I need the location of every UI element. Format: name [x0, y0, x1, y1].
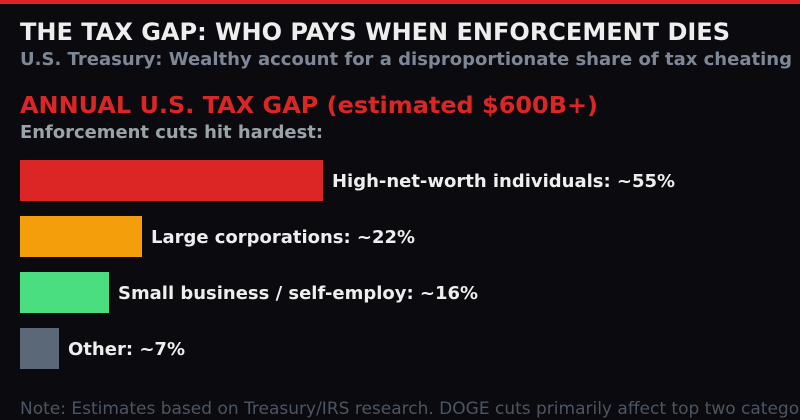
bar chart [20, 160, 675, 369]
subtitle: U.S. Treasury: Wealthy account for a disproportionate share of tax cheating [20, 50, 792, 70]
bar: small business: Small business / self-employ: ~16% [118, 284, 478, 304]
bar: small business [20, 272, 478, 313]
bar: other [20, 328, 185, 369]
bar: high-net-worth: High-net-worth individuals: ~55% [332, 172, 675, 192]
section heading: ANNUAL U.S. TAX GAP (estimated $600B+) [20, 91, 598, 119]
bar: large corporations: Large corporations: ~22% [151, 228, 415, 248]
title: THE TAX GAP: WHO PAYS WHEN ENFORCEMENT DIES [20, 18, 730, 46]
bar: high-net-worth [20, 160, 675, 201]
bar: large corporations [20, 216, 415, 257]
section subheading: Enforcement cuts hit hardest: [20, 123, 323, 143]
top accent bar [0, 0, 800, 4]
bar: other: Other: ~7% [68, 340, 185, 360]
